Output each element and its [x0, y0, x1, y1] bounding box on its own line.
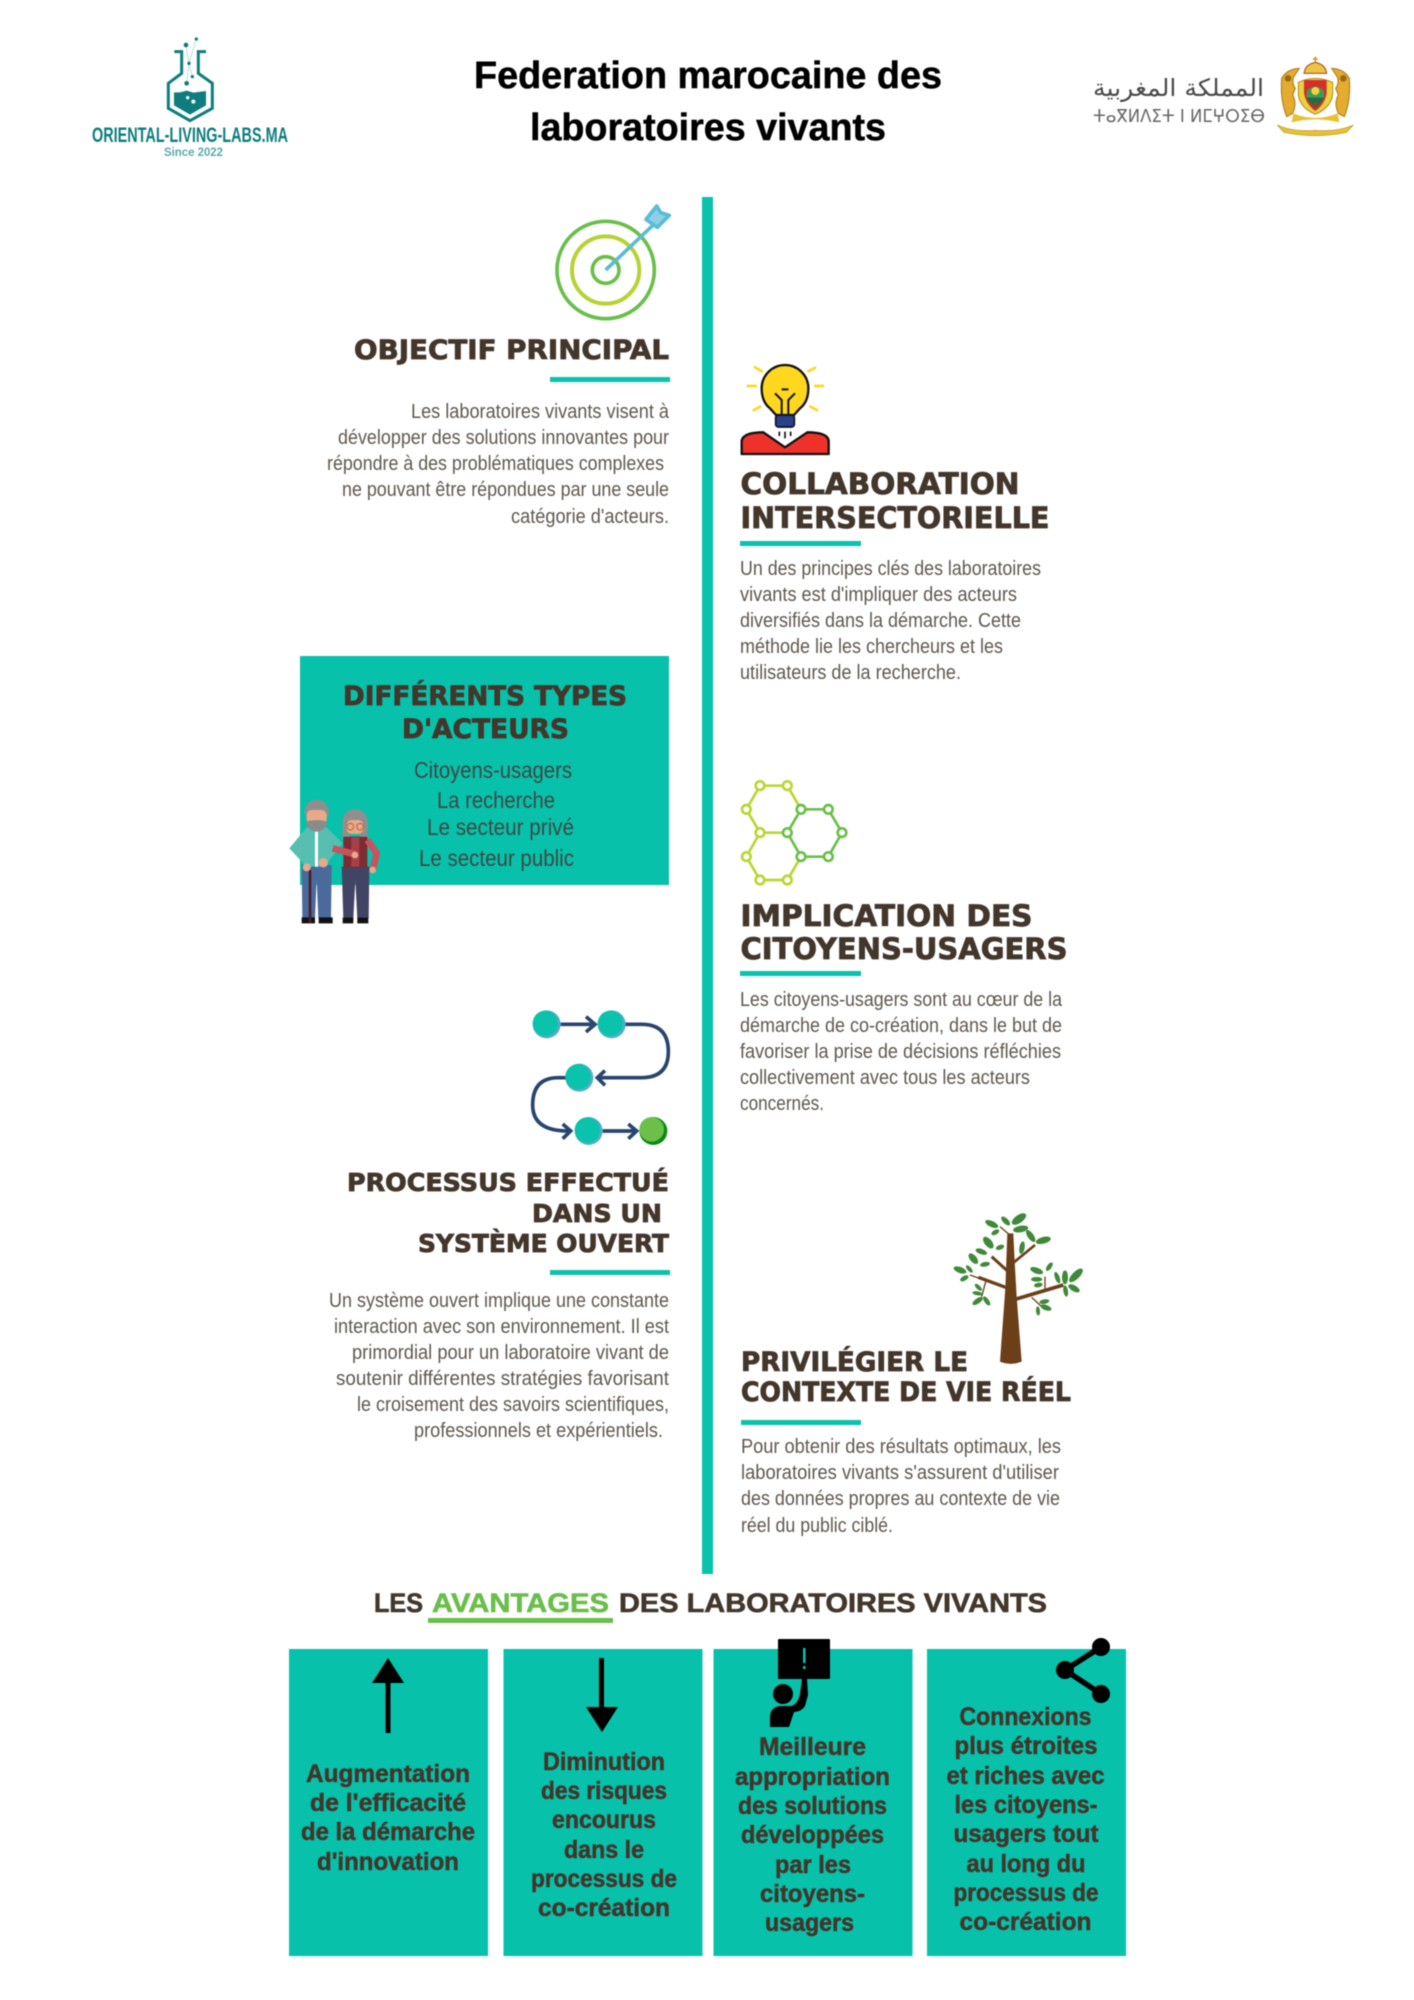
text block: vivants est d'impliquer des acteurs [740, 584, 1017, 606]
heading: D'ACTEURS [402, 714, 569, 745]
panel: appropriation [714, 1639, 912, 1956]
list of actors: Le secteur public [419, 845, 574, 871]
text block [329, 1290, 669, 1442]
heading: CITOYENS-USAGERS [740, 932, 1068, 966]
text block: concernés. [740, 1093, 824, 1115]
section: contexte de vie réel [741, 1211, 1085, 1537]
section: processus [329, 1010, 670, 1442]
text block: Un système ouvert implique une constante [329, 1290, 669, 1312]
icon: process path [533, 1010, 668, 1145]
icon: share network [1056, 1638, 1110, 1702]
panel text [301, 1760, 475, 1876]
panel text: des risques [541, 1777, 667, 1805]
text block: soutenir différentes stratégies favorisant [336, 1368, 669, 1390]
heading [740, 899, 1068, 966]
text block: utilisateurs de la recherche. [740, 662, 961, 684]
list of actors [414, 757, 574, 871]
panel text: encourus [552, 1806, 656, 1834]
panel text: Meilleure [759, 1733, 866, 1761]
text block: catégorie d'acteurs. [511, 506, 669, 528]
icon: light bulb over person [742, 365, 829, 454]
list of actors: Citoyens-usagers [414, 757, 572, 783]
text block: le croisement des savoirs scientifiques, [357, 1394, 669, 1416]
icon: person holding sign [770, 1639, 830, 1727]
panel text: usagers tout [954, 1820, 1099, 1848]
heading: PRIVILÉGIER LE [741, 1346, 968, 1378]
kingdom of Morocco wordmark [1093, 74, 1265, 127]
heading: DIFFÉRENTS TYPES [343, 680, 627, 712]
panel text: processus de [954, 1879, 1099, 1907]
panel text: de la démarche [301, 1818, 475, 1846]
text block: diversifiés dans la démarche. Cette [740, 610, 1021, 632]
title: laboratoires vivants [530, 107, 886, 149]
heading: CONTEXTE DE VIE RÉEL [741, 1376, 1071, 1408]
panel: efficacité [289, 1649, 488, 1956]
icon: up arrow [372, 1658, 404, 1733]
kingdom of Morocco wordmark: المملكة المغربية [1093, 74, 1264, 102]
icon: target with arrow [557, 206, 669, 319]
text block [740, 558, 1041, 684]
heading: les avantages [374, 1588, 1047, 1623]
panel text: processus de [531, 1865, 677, 1893]
heading [740, 467, 1050, 535]
icon: tree [953, 1211, 1085, 1364]
heading: COLLABORATION [740, 467, 1020, 501]
heading: SYSTÈME OUVERT [418, 1229, 669, 1258]
heading: INTERSECTORIELLE [740, 501, 1050, 535]
text block: interaction avec son environnement. Il est [334, 1316, 669, 1338]
text block: ne pouvant être répondues par une seule [342, 479, 669, 501]
text block [327, 401, 670, 528]
panel text: développées [741, 1821, 884, 1849]
icon: royal emblem [1277, 57, 1353, 136]
heading: OBJECTIF PRINCIPAL [354, 335, 669, 366]
panel text: des solutions [738, 1792, 887, 1820]
panel text: plus étroites [954, 1732, 1098, 1760]
text block: Les citoyens-usagers sont au cœur de la [740, 989, 1063, 1011]
panel text: usagers [765, 1909, 854, 1937]
text block: répondre à des problématiques complexes [327, 453, 664, 475]
title [474, 55, 942, 149]
text block: Les laboratoires vivants visent à [411, 401, 670, 423]
panel text: dans le [564, 1836, 644, 1864]
panel text [946, 1703, 1105, 1936]
text block: des données propres au contexte de vie [741, 1488, 1060, 1510]
panel text: de l'efficacité [310, 1789, 466, 1817]
panel text: les citoyens- [954, 1791, 1098, 1819]
heading: les avantages: DES LABORATOIRES VIVANTS [619, 1588, 1047, 1618]
panel: connexions [927, 1638, 1126, 1956]
text block: réel du public ciblé. [741, 1515, 893, 1537]
panel text: au long du [966, 1850, 1086, 1878]
panel: risques [504, 1649, 702, 1956]
panel text: d'innovation [317, 1848, 459, 1876]
panel text: par les [775, 1851, 851, 1879]
text block [741, 1436, 1061, 1537]
text block: Un des principes clés des laboratoires [740, 558, 1041, 580]
logo: Oriental Living Labs: ORIENTAL-LIVING-LABS.MA [92, 124, 288, 147]
panel text: appropriation [735, 1763, 890, 1791]
heading: les avantages: AVANTAGES [432, 1588, 609, 1618]
icon: down arrow [586, 1658, 618, 1732]
logo: Oriental Living Labs [92, 37, 288, 159]
text block: favoriser la prise de décisions réfléchies [740, 1041, 1061, 1063]
text block: professionnels et expérientiels. [414, 1420, 663, 1442]
text block: Pour obtenir des résultats optimaux, les [741, 1436, 1061, 1458]
heading: IMPLICATION DES [740, 899, 1032, 933]
section: objectif principal [327, 206, 670, 528]
icon: elderly couple [289, 800, 377, 923]
panel text: et riches avec [946, 1762, 1105, 1790]
logo: Oriental Living Labs: Since 2022 [164, 145, 223, 159]
panel: types d'acteurs [289, 656, 669, 923]
list of actors: Le secteur privé [427, 814, 574, 840]
section: implication des citoyens-usagers [740, 781, 1068, 1115]
text block: démarche de co-création, dans le but de [740, 1015, 1062, 1037]
section: collaboration intersectorielle [740, 365, 1050, 684]
kingdom of Morocco wordmark: ⵜⴰⴳⵍⴷⵉⵜ ⵏ ⵍⵎⵖⵔⵉⴱ [1093, 106, 1265, 127]
panel text: Diminution [543, 1748, 665, 1776]
list of actors: La recherche [437, 787, 555, 813]
heading [347, 1168, 669, 1258]
panel text: co-création [538, 1894, 670, 1922]
text block: primordial pour un laboratoire vivant de [352, 1342, 669, 1364]
panel text: Augmentation [306, 1760, 470, 1788]
panel text [735, 1733, 890, 1937]
text block: laboratoires vivants s'assurent d'utiliser [741, 1462, 1059, 1484]
heading: DANS UN [532, 1199, 662, 1228]
panel text [531, 1748, 677, 1922]
heading [741, 1346, 1071, 1408]
panel text: Connexions [960, 1703, 1092, 1731]
title: Federation marocaine des [474, 55, 942, 97]
panel text: co-création [960, 1908, 1092, 1936]
text block: méthode lie les chercheurs et les [740, 636, 1003, 658]
central timeline bar [702, 197, 713, 1574]
heading: les avantages: LES [374, 1588, 423, 1618]
panel text: citoyens- [760, 1880, 865, 1908]
text block [740, 989, 1063, 1115]
icon: hexagon network [742, 781, 846, 884]
text block: collectivement avec tous les acteurs [740, 1067, 1030, 1089]
heading [343, 680, 627, 745]
heading: PROCESSUS EFFECTUÉ [347, 1168, 669, 1197]
text block: développer des solutions innovantes pour [338, 427, 669, 449]
